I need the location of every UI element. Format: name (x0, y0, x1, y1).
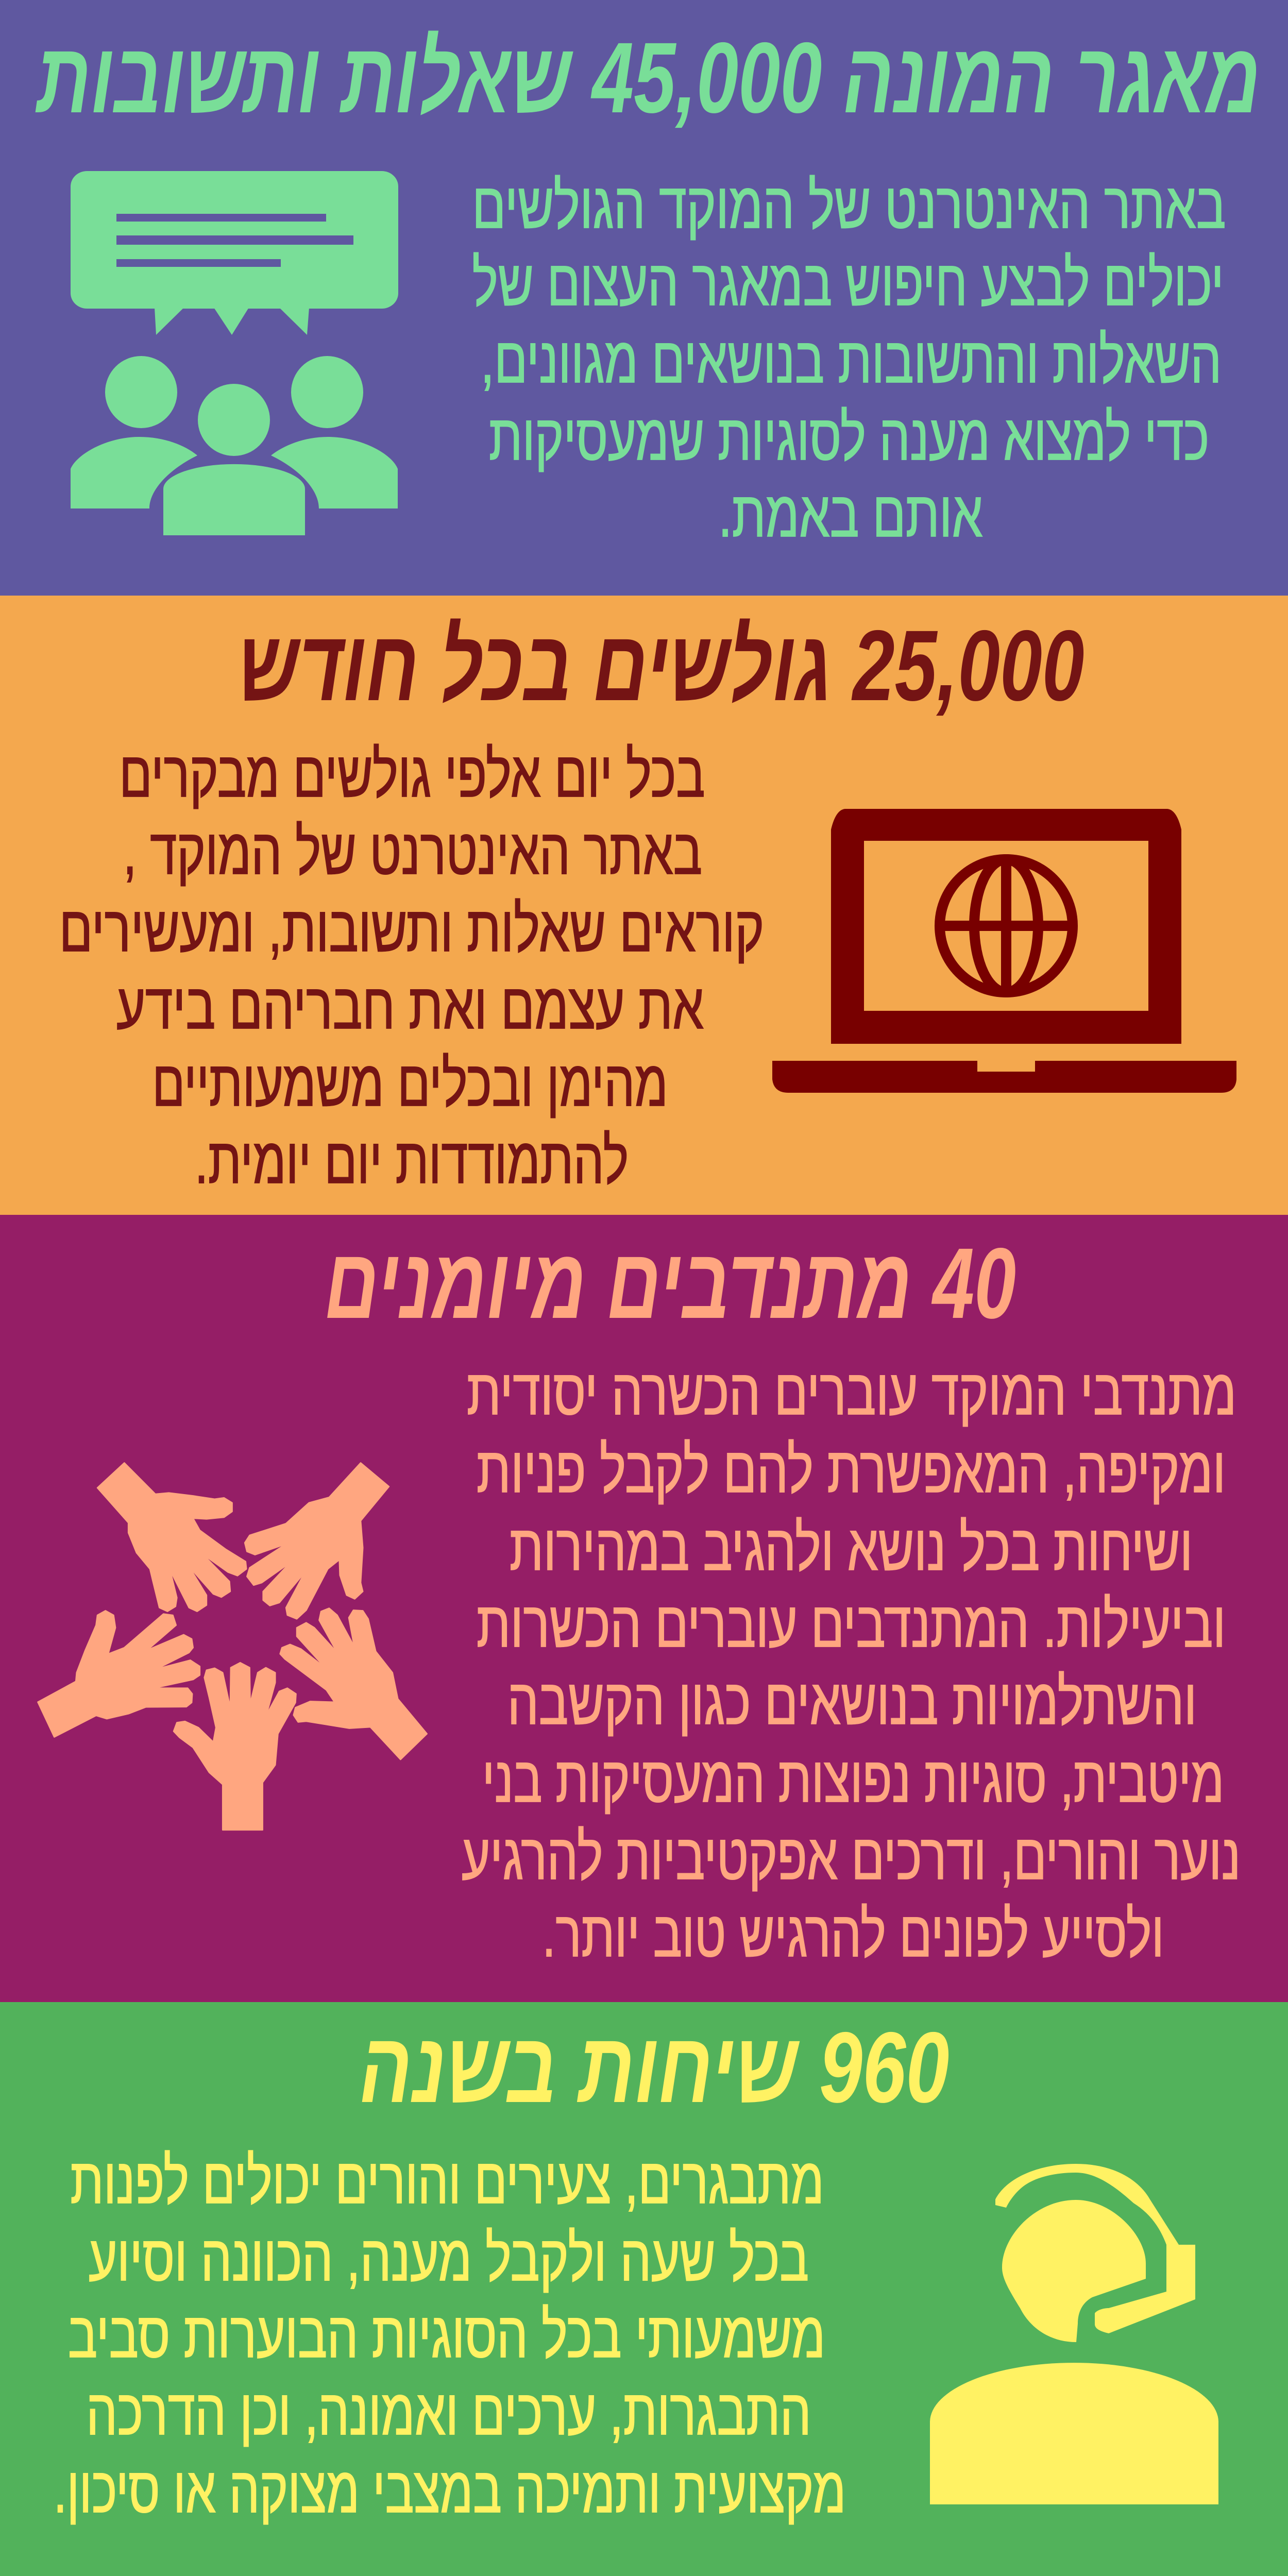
text block: calls description: בכל שעה ולקבל מענה, הכוונה וסיוע (89, 2223, 809, 2294)
text block: question bank description (472, 170, 1226, 550)
text block: visitors description (59, 739, 764, 1197)
text block: calls description: משמעותי בכל הסוגיות הבוערות סביב (68, 2299, 825, 2371)
text block: visitors description: מהימן ובכלים משמעותיים (152, 1048, 668, 1120)
text block: visitors description: את עצמם ואת חבריהם בידע (116, 971, 704, 1042)
text block: visitors description: להתמודדות יום יומית. (195, 1125, 629, 1197)
text block: calls description: מתבגרים, צעירים והורים יכולים לפנות (70, 2145, 824, 2217)
text block: question bank description: אותם באמת. (718, 479, 983, 550)
text block: volunteers description (462, 1357, 1241, 1970)
heading: volunteers: 40 מתנדבים מיומנים (325, 1227, 1016, 1340)
text block: visitors description: באתר האינטרנט של המוקד , (123, 816, 702, 888)
text block: visitors description: קוראים שאלות ותשובות, ומעשירים (59, 893, 764, 965)
text block: calls description: התבגרות, ערכים ואמונה, וכן הדרכה (87, 2377, 811, 2448)
heading: calls per year: 960 שיחות בשנה (360, 2011, 949, 2124)
panel: 40 trained volunteers (0, 1215, 1288, 2002)
text block: calls description: מקצועית ותמיכה במצבי מצוקה או סיכון. (54, 2454, 846, 2526)
text block: visitors description: בכל יום אלפי גולשים מבקרים (120, 739, 705, 810)
panel: 25,000 monthly visitors (0, 596, 1288, 1215)
icon: five hands (38, 1463, 427, 1830)
icon: laptop with globe (772, 809, 1236, 1093)
text block: calls description (54, 2145, 846, 2526)
panel: 45,000 questions and answers (0, 0, 1288, 596)
heading: monthly visitors: 25,000 גולשים בכל חודש (238, 609, 1084, 722)
panel: 960 calls per year (0, 2002, 1288, 2576)
icon: people with speech bubble (71, 171, 398, 535)
icon: support agent with headset (930, 2164, 1218, 2504)
